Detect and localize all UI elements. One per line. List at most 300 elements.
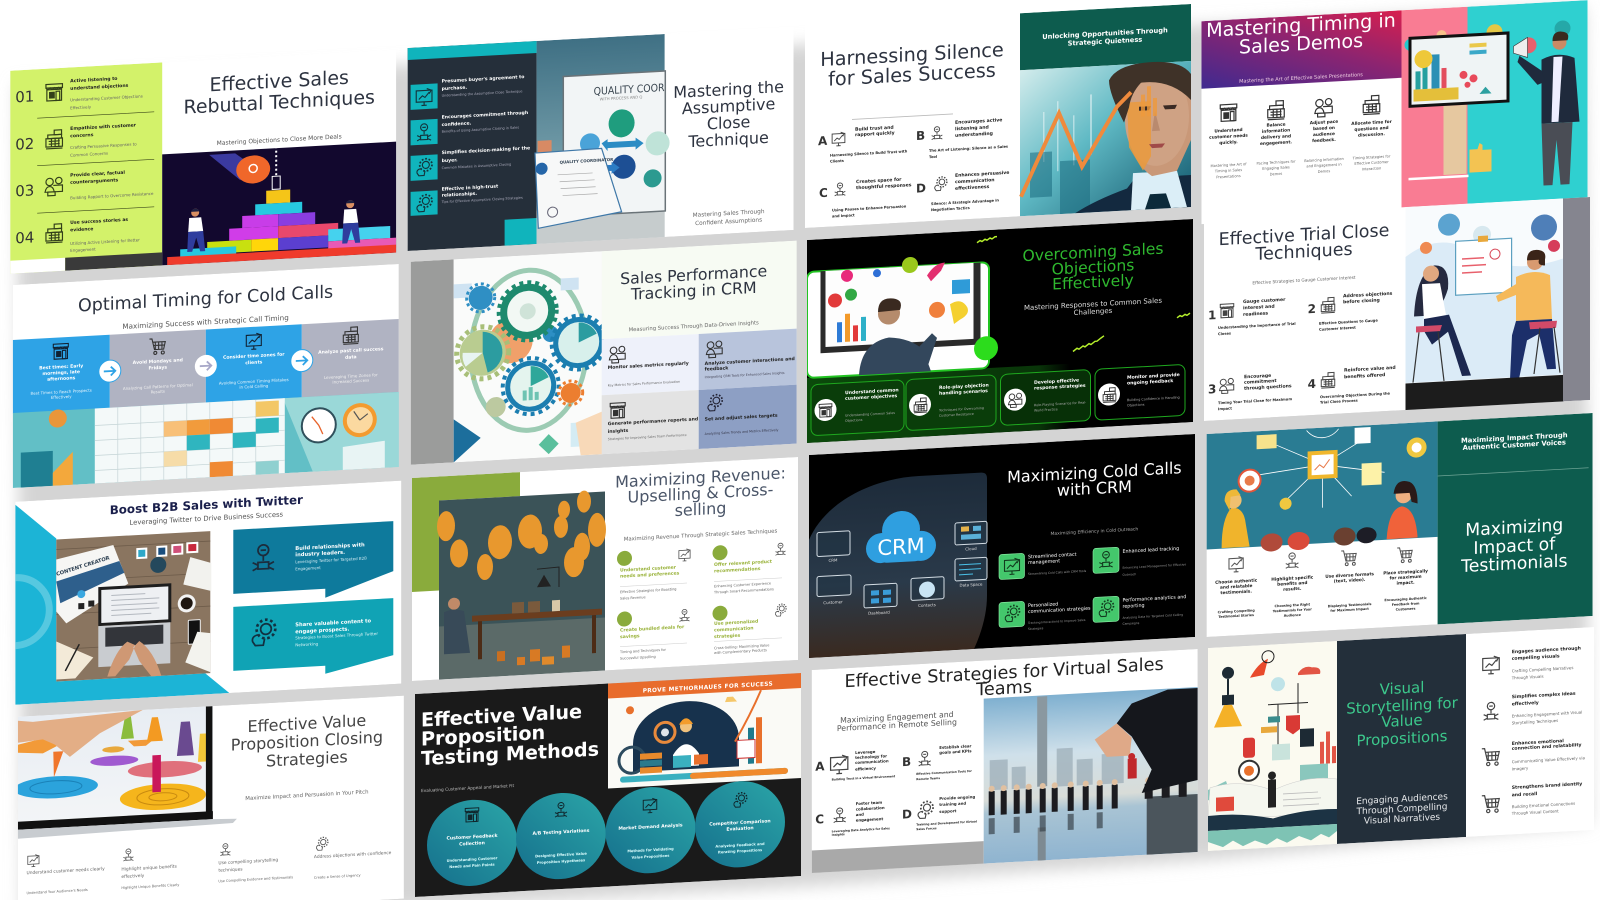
item 4 xyxy=(1482,781,1582,818)
slide: Boost B2B Sales with Twitter xyxy=(0,481,401,707)
item 4: Cross-Selling: Maximizing Value xyxy=(714,643,769,650)
panel: dark title: Propositions xyxy=(1357,727,1448,750)
panel: dark title: Engaging Audiences xyxy=(1356,792,1448,807)
card 4: Monitor and provide xyxy=(1127,372,1180,381)
item 1 xyxy=(1483,645,1581,682)
illustration: idea network xyxy=(1207,421,1438,555)
column 2: Highlight specific xyxy=(1271,574,1314,583)
card 3: Role-Playing Scenarios for Real- xyxy=(1034,400,1087,407)
step 4: data xyxy=(345,354,357,361)
illustration: open book xyxy=(1208,641,1337,851)
item: Effective in high-trust xyxy=(442,184,499,193)
step 1: mornings, late xyxy=(42,369,80,377)
item B: B xyxy=(902,755,911,769)
step 2: Avoid Mondays and xyxy=(133,357,183,366)
item 3 xyxy=(999,598,1091,633)
step 3: feedback. xyxy=(1312,137,1336,144)
item A xyxy=(818,124,908,164)
subtitle: Maximize Impact and Persuasion in Your Pitch xyxy=(245,789,369,802)
item 2: Outreach xyxy=(1122,572,1136,577)
item 3 xyxy=(1482,737,1585,773)
item 1: management xyxy=(1028,558,1060,566)
step 3: clients xyxy=(245,359,263,366)
item 1: readiness xyxy=(1243,310,1268,318)
card 1 xyxy=(811,380,904,436)
item B xyxy=(902,743,972,782)
step 1: Best Times to Reach Prospects xyxy=(31,388,92,396)
panel: green title: Testimonials xyxy=(1460,551,1568,577)
panel: green title: Maximizing Impact Through xyxy=(1461,431,1568,445)
quadrant 4: Set and adjust sales targets xyxy=(705,413,778,423)
step 2: Engaging Sales xyxy=(1262,165,1290,171)
column 1: Crafting Compelling xyxy=(1218,608,1255,614)
quadrant 2: feedback xyxy=(705,365,729,373)
subtitle: Mastering Responses to Common Sales xyxy=(1024,297,1162,312)
item D: Silence: A Strategic Advantage in xyxy=(931,198,999,206)
item 01: understand objections xyxy=(70,83,129,92)
item xyxy=(411,110,528,145)
item 2: Enhancing Lead Management for Effective xyxy=(1122,562,1186,570)
item 4 xyxy=(712,602,786,655)
step 1: Understand xyxy=(1214,127,1243,134)
slide: Overcoming Sales Objections Effectively xyxy=(807,219,1193,443)
title: Harnessing Silence xyxy=(820,38,1004,71)
slide: Sales Performance Tracking in CRM xyxy=(411,241,797,465)
quadrant 4 xyxy=(699,385,797,449)
image: CRM cloud: Data Space xyxy=(960,582,983,588)
title: Proposition xyxy=(421,721,545,751)
item A: Harnessing Silence to Build Trust with xyxy=(830,149,908,158)
item 04 xyxy=(16,218,140,252)
item: Benefits of Using Assumptive Closing in Sales xyxy=(442,126,519,134)
column 2: benefits and xyxy=(1277,580,1307,588)
item C xyxy=(819,176,912,219)
column 4: Customers xyxy=(1396,607,1416,612)
step 2: Balance xyxy=(1266,122,1286,129)
column 2: results. xyxy=(1283,586,1302,593)
item 2: Offer relevant product xyxy=(714,559,773,568)
subtitle: Maximizing Success with Strategic Call Timing xyxy=(122,313,289,331)
illustration: presenter xyxy=(1402,0,1588,213)
column 3: techniques xyxy=(218,866,243,874)
item 4 xyxy=(1308,365,1396,405)
image: businessman with chart xyxy=(1020,60,1191,216)
bands xyxy=(13,319,399,414)
item 4: Use personalized xyxy=(714,619,758,627)
item 02: Empathize with customer xyxy=(70,122,137,132)
step 1: Mastering the Art of xyxy=(1211,162,1247,168)
item C: C xyxy=(819,186,828,200)
item 4: Strengthens brand identity xyxy=(1512,781,1582,791)
circle 3: Market Demand Analysis xyxy=(618,822,683,832)
step 4: Effective Customer xyxy=(1354,160,1389,166)
image: presenter at whiteboard xyxy=(807,252,998,378)
item 2: Through Smart Recommendations xyxy=(713,587,774,595)
panel: green header: Unlocking Opportunities Through xyxy=(1042,26,1168,41)
item 4: Overcoming Objections During the xyxy=(1320,391,1391,399)
item 1: Streamlined contact xyxy=(1028,552,1077,560)
item 3: Imagery xyxy=(1512,766,1529,771)
panel: green title xyxy=(1438,413,1593,624)
column 2: Choosing the Right xyxy=(1275,602,1310,608)
card 1: Leveraging Twitter for Targeted B2B xyxy=(295,556,367,564)
item 1: needs and preferences xyxy=(620,570,680,580)
slide: Visual Storytelling for Value Propositions xyxy=(1208,627,1594,851)
item 2: Enhanced lead tracking xyxy=(1122,546,1179,555)
column 4: impact. xyxy=(1397,580,1415,587)
column 1: Understand customer needs clearly xyxy=(26,866,105,876)
card 2 xyxy=(906,375,996,431)
item 3: Timing and Techniques for xyxy=(619,648,667,654)
step 3: Demos xyxy=(1318,169,1330,174)
quadrant 4: Analyzing Sales Trends and Metrics Effectively xyxy=(705,428,778,436)
circle 4: Iterating Propositions xyxy=(718,848,762,854)
item: buyer. xyxy=(442,157,458,164)
item 3: Communicating Value Effectively via xyxy=(1512,755,1585,764)
item D: Provide ongoing xyxy=(939,794,975,801)
item 1: Engages audience through xyxy=(1512,645,1581,655)
item B: Remote Teams xyxy=(916,776,940,781)
step 3: audience xyxy=(1313,131,1335,138)
card 1: Understand common xyxy=(845,387,899,396)
card 1: Understanding Common Sales xyxy=(845,411,895,418)
column 3: for Maximum Impact xyxy=(1330,607,1369,613)
step 1: Best times: Early xyxy=(39,363,83,371)
item 01: Effectively xyxy=(70,104,92,110)
title: Testing Methods xyxy=(421,737,599,770)
title: Close xyxy=(707,112,750,133)
circle 2: Designing Effective Value xyxy=(535,852,587,858)
quadrant 1 xyxy=(602,334,699,395)
item D: Negotiation Tactics xyxy=(931,206,970,212)
panel: green title: Authentic Customer Voices xyxy=(1463,438,1566,452)
illustration: methodologies: PROVE METHORHAUES FOR SCUCESS xyxy=(643,682,773,695)
title: Proposition Closing xyxy=(231,727,383,755)
subtitle: Mastering Sales Through xyxy=(693,209,765,219)
step 3: Avoiding Common Timing Mistakes xyxy=(219,377,289,386)
item C: and xyxy=(856,812,864,817)
card 3: Develop effective xyxy=(1034,377,1079,386)
item A: rapport quickly xyxy=(855,130,895,138)
title: Techniques xyxy=(1254,240,1353,265)
item 2: Enhancing Engagement with Visual xyxy=(1512,710,1582,718)
item 03: counterarguments xyxy=(70,177,118,186)
item 3: savings xyxy=(620,633,640,640)
header panel xyxy=(602,241,797,339)
item 4: benefits offered xyxy=(1344,372,1385,380)
card 3: World Practice xyxy=(1034,407,1058,413)
item C: Foster team xyxy=(856,800,882,806)
item B: B xyxy=(916,128,925,143)
item B: The Art of Listening: Silence as a Sales xyxy=(929,145,1008,153)
step 2 xyxy=(123,337,193,396)
circle 2: Proposition Hypotheses xyxy=(537,858,585,865)
subtitle: Effective Strategies to Gauge Customer Interest xyxy=(1252,275,1356,286)
panel: green header: Strategic Quietness xyxy=(1068,36,1142,48)
item A: communication xyxy=(855,758,889,765)
title: Optimal Timing for Cold Calls xyxy=(78,283,333,316)
item 1: Understanding the Importance of Trial xyxy=(1218,322,1296,330)
header: Mastering the Art of Effective Sales Presentations xyxy=(1239,72,1363,85)
subtitle: Challenges xyxy=(1074,307,1113,317)
quadrant 3 xyxy=(602,390,699,454)
item 1: interest and xyxy=(1243,304,1275,311)
step 4: Allocate time for xyxy=(1351,119,1393,127)
item 2: 2 xyxy=(1308,302,1316,316)
item A xyxy=(815,748,896,783)
image: laptop with targets xyxy=(14,705,237,839)
subtitle: Maximizing Efficiency in Cold Outreach xyxy=(1051,526,1138,537)
item 04: Engagement xyxy=(70,247,96,253)
image: desk with laptop xyxy=(56,531,211,681)
item B: Encourages active xyxy=(955,117,1002,126)
subtitle: Maximizing Revenue Through Strategic Sales Techniques xyxy=(624,528,777,543)
item C: Using Pauses to Enhance Persuasion xyxy=(832,204,907,213)
step 1 xyxy=(31,342,92,401)
item 04: Use success stories as xyxy=(70,217,128,226)
item 3: 3 xyxy=(1208,382,1216,396)
title: Upselling & Cross- xyxy=(628,480,773,507)
slide: Effective Value Proposition Closing Strategies xyxy=(14,696,404,900)
item xyxy=(411,182,523,216)
item 2: Storytelling Techniques xyxy=(1512,718,1558,725)
item 3: Successful Upselling xyxy=(620,655,656,661)
item A: A xyxy=(818,134,828,148)
step 2: Analyzing Call Patterns for Optimal xyxy=(123,382,193,391)
item 02: 02 xyxy=(15,135,34,154)
step 2: delivery and xyxy=(1261,133,1291,141)
panel: dark list xyxy=(408,41,537,251)
quadrant 1: Key Metrics for Sales Performance Evaluation xyxy=(608,380,680,388)
step 2 xyxy=(1257,100,1296,177)
item 04: evidence xyxy=(70,226,93,233)
column 2: Audience xyxy=(1284,613,1302,618)
item D xyxy=(916,170,1009,213)
item 2: Simplifies complex ideas xyxy=(1512,691,1576,700)
item 3: connection and relatability xyxy=(1512,742,1582,752)
subtitle: Confident Assumptions xyxy=(695,217,762,227)
item C: Creates space for xyxy=(856,177,902,185)
card 1: Engagement xyxy=(295,565,321,571)
item C: engagement xyxy=(856,816,883,823)
column 1: and relatable xyxy=(1220,583,1252,591)
item 03 xyxy=(16,170,154,200)
item xyxy=(411,145,530,181)
title: Assumptive xyxy=(682,94,775,118)
title: Rebuttal Techniques xyxy=(183,86,375,119)
column 1: testimonials. xyxy=(1220,589,1252,596)
item: Common Mistakes in Assumptive Closing xyxy=(442,162,511,170)
arrow 1 xyxy=(99,360,121,383)
column 3: (text, video). xyxy=(1334,577,1366,585)
slide: Optimal Timing for Cold Calls xyxy=(13,264,399,488)
card 2 xyxy=(233,598,393,679)
item 3: commitment xyxy=(1244,378,1277,386)
slide: Maximizing Cold Calls with CRM xyxy=(809,434,1195,658)
item 4: Reinforce value and xyxy=(1344,365,1396,374)
image: CRM cloud: Dashboard xyxy=(868,610,890,616)
item B: Establish clear xyxy=(939,743,972,750)
item: relationships. xyxy=(442,191,477,199)
item B: goals and KPIs xyxy=(939,748,972,755)
step 3 xyxy=(219,331,289,391)
step 4: Timing Strategies for xyxy=(1352,154,1391,161)
illustration: pyramid xyxy=(162,140,396,265)
step 1: customer needs xyxy=(1209,133,1248,141)
item 03: Building Rapport to Overcome Resistance xyxy=(70,191,154,200)
card 1: industry leaders. xyxy=(295,550,345,558)
item C: collaboration xyxy=(856,805,885,812)
item A: Leverage xyxy=(855,749,876,755)
header panel: Measuring Success Through Data-Driven Insights xyxy=(629,320,759,333)
arrow 3 xyxy=(291,349,313,372)
column 4 xyxy=(1383,546,1428,612)
item 01: 01 xyxy=(15,87,34,106)
panel: green title: Maximizing xyxy=(1465,516,1563,541)
title: Effective Sales xyxy=(209,67,349,96)
item 3: communication strategies xyxy=(1028,606,1091,615)
column 2: Highlight unique benefits xyxy=(121,864,177,873)
step 1: Timing in Sales xyxy=(1214,168,1242,174)
circle 3 xyxy=(606,785,696,876)
column 4: for maximum xyxy=(1390,574,1422,582)
item 1: Effective Strategies for Boosting xyxy=(620,587,677,594)
item 4: Campaigns xyxy=(1122,621,1140,626)
item B: understanding xyxy=(955,131,993,139)
panel: dark title xyxy=(1337,634,1466,844)
column 1: Testimonial Stories xyxy=(1218,613,1254,619)
item A: Building Trust in a Virtual Environment xyxy=(832,774,896,782)
item 04: 04 xyxy=(15,228,34,247)
item 1: Sales Revenue xyxy=(620,595,646,601)
item D: training and xyxy=(939,801,966,807)
item C xyxy=(815,799,890,838)
item 3: Create bundled deals for xyxy=(620,624,685,634)
item 4 xyxy=(1093,592,1186,628)
subtitle: Evaluating Customer Appeal and Market Fit xyxy=(421,783,514,794)
item 03: Provide clear, factual xyxy=(70,170,125,179)
step 4 xyxy=(1351,95,1393,172)
item 02 xyxy=(16,124,136,157)
title: Effective Value xyxy=(248,711,366,736)
item 2: before closing xyxy=(1343,297,1380,305)
image: CRM cloud: Contacts xyxy=(918,602,936,608)
image: calendar and clocks xyxy=(13,391,399,488)
circle 4: Evaluation xyxy=(726,825,754,833)
step 4 xyxy=(318,325,384,385)
item 4: 4 xyxy=(1308,377,1316,391)
item 3 xyxy=(617,608,690,661)
step 1: quickly. xyxy=(1219,139,1238,146)
item 4: with Complementary Products xyxy=(714,648,767,655)
item 2: effectively xyxy=(1512,700,1539,707)
accent block xyxy=(412,472,520,592)
item 02: Crafting Persuasive Responses to xyxy=(70,141,137,150)
card 2: Role-play objection xyxy=(939,382,989,391)
column 3 xyxy=(218,840,293,883)
item D: D xyxy=(916,181,926,196)
card 4: ongoing feedback xyxy=(1127,378,1174,387)
item D: Training and Development for Virtual xyxy=(916,819,977,827)
item 2 xyxy=(1093,543,1186,579)
card 2: Techniques for Overcoming xyxy=(938,406,984,413)
item D xyxy=(902,794,977,832)
item 2: Enhancing Customer Experience xyxy=(714,581,771,589)
item: purchase. xyxy=(442,85,467,92)
item C: thoughtful responses xyxy=(856,182,912,191)
item 3: Impact xyxy=(1218,406,1232,411)
panel: green title: Impact of xyxy=(1473,534,1556,559)
circle 4: Analyzing Feedback and xyxy=(715,842,765,849)
image: CRM cloud: Customer xyxy=(823,599,843,605)
item 3: Timing Your Trial Close for Maximum xyxy=(1218,397,1292,405)
arrow 2 xyxy=(195,354,217,377)
card 4 xyxy=(1095,364,1185,420)
image: CRM cloud: CRM xyxy=(828,557,838,563)
image: certificates: WITH PROCESS AND Q xyxy=(600,94,642,102)
title: Objections xyxy=(1052,256,1134,279)
step 3: Adjust pace xyxy=(1310,119,1338,126)
subtitle: Performance in Remote Selling xyxy=(837,718,957,733)
illustration: consultation xyxy=(1406,198,1564,411)
item 4: reporting xyxy=(1122,603,1145,610)
step 4: questions and xyxy=(1354,125,1389,133)
item D: Sales Forces xyxy=(916,826,937,831)
decorative squiggles xyxy=(977,226,1190,357)
step 3 xyxy=(1304,98,1344,175)
item D: D xyxy=(902,807,912,822)
title: Maximizing Revenue: xyxy=(615,463,786,492)
card 1: customer objectives xyxy=(845,393,898,402)
item: Tips for Effective Assumptive Closing Strategies xyxy=(441,196,523,204)
step 2: Fridays xyxy=(148,365,167,372)
panel: dark title: Visual Narratives xyxy=(1364,813,1440,827)
item 1: Gauge customer xyxy=(1243,297,1286,305)
item 2: Customer Interest xyxy=(1319,326,1356,332)
image: businessman with figurines xyxy=(984,687,1198,864)
item A: technology for xyxy=(855,753,887,760)
header panel: Tracking in CRM xyxy=(630,278,757,304)
item 3: through questions xyxy=(1244,383,1292,392)
step 4: Interaction xyxy=(1362,166,1381,171)
item 1: compelling visuals xyxy=(1512,653,1560,662)
slide: Harnessing Silence xyxy=(805,4,1191,228)
steps xyxy=(1209,95,1393,180)
title: Mastering the xyxy=(673,77,784,102)
card 1: Objections xyxy=(845,418,863,423)
item 02: concerns xyxy=(70,132,94,139)
item 02: Common Concerns xyxy=(70,151,108,158)
item B: Tool xyxy=(929,155,937,159)
item 3: Tracking Interactions to Improve Sales xyxy=(1027,618,1086,625)
circle 1: Collection xyxy=(459,840,485,848)
quadrant 3: insights xyxy=(608,428,629,435)
item D: Enhances persuasive xyxy=(955,170,1009,179)
title: selling xyxy=(675,498,726,520)
column 1 xyxy=(26,851,105,895)
step 2: engagement. xyxy=(1260,139,1292,147)
step 1: Effectively xyxy=(51,394,72,400)
item 01: Understanding Customer Objections xyxy=(70,93,143,102)
item 4: Building Emotional Connections xyxy=(1512,801,1575,809)
card 2: Strategies to Boost Sales Through Twitter xyxy=(295,631,378,640)
item 2: recommendations xyxy=(714,566,761,575)
card 1 xyxy=(233,521,393,603)
column 4: Place strategically xyxy=(1383,568,1428,577)
step 4: Increased Success xyxy=(332,378,369,385)
card 4: Building Confidence in Handling xyxy=(1127,395,1180,402)
title: Effective Trial Close xyxy=(1219,221,1389,250)
